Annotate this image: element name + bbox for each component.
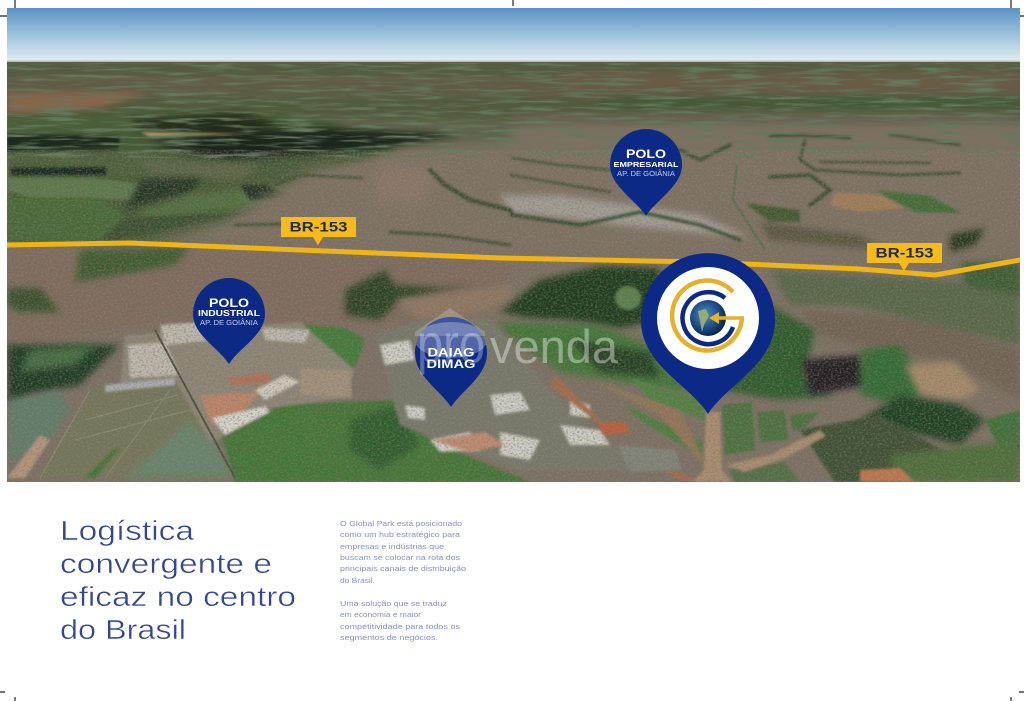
- road and fields on the right: [733, 165, 985, 252]
- road label: BR-153 left: BR-153: [290, 218, 348, 234]
- pin: Daiag Dimag: [415, 317, 487, 407]
- pin: Polo Empresarial: AP. DE GOIÂNIA: [617, 169, 675, 178]
- pin: Polo Empresarial: EMPRESARIAL: [614, 160, 679, 169]
- mid urban area: [159, 123, 1014, 244]
- road label: BR-153 left: [281, 217, 356, 245]
- body text: em economia e maior: [340, 610, 422, 619]
- pin: Daiag Dimag: DIMAG: [426, 359, 476, 371]
- heading: Logística: [60, 515, 195, 546]
- pin: Daiag Dimag: DAIAG: [428, 348, 475, 360]
- horizon bands: [0, 62, 1024, 148]
- body text: buscam se colocar na rota dos: [340, 553, 460, 562]
- access roads under main pin: [692, 412, 826, 482]
- pin: Polo Empresarial: POLO: [626, 149, 666, 161]
- body text: [340, 519, 466, 642]
- heading: convergente e: [60, 548, 272, 579]
- terrain base: [7, 62, 1020, 483]
- body text: como um hub estratégico para: [340, 530, 461, 539]
- left fields and forests: [7, 112, 460, 245]
- green creeks through the city: [235, 135, 960, 245]
- watermark: provenda: [415, 308, 619, 375]
- watermark: provenda: pro: [417, 312, 485, 375]
- pin: Polo Industrial: POLO: [209, 298, 249, 310]
- body text: O Global Park está posicionado: [340, 519, 462, 528]
- pin: Global Park main location: [641, 253, 775, 414]
- body text: principais canais de distribuição: [340, 564, 466, 573]
- pin: Polo Empresarial: [610, 129, 682, 216]
- watermark: provenda: venda: [490, 320, 619, 373]
- pin: Polo Industrial: INDUSTRIAL: [198, 309, 260, 318]
- road: BR-153: [7, 243, 1020, 275]
- road label: BR-153 right: BR-153: [876, 244, 934, 260]
- heading: [60, 515, 296, 645]
- heading: eficaz no centro: [60, 581, 296, 612]
- body text: competitividade para todos os: [340, 622, 460, 631]
- industrial district left: [105, 322, 355, 478]
- road label: BR-153 right: [867, 243, 942, 271]
- body text: empresas e indústrias que: [340, 542, 444, 551]
- lots and pasture lower left: [7, 385, 232, 478]
- photo grain: [7, 63, 1020, 482]
- industrial district centre: [375, 318, 704, 482]
- body text: segmentos de negócios.: [340, 633, 438, 642]
- heading: do Brasil: [60, 614, 186, 645]
- near-field urban areas: [7, 247, 1020, 400]
- forest and green areas: [7, 266, 1020, 482]
- pin: Polo Industrial: [193, 278, 265, 364]
- sky: [7, 8, 1020, 63]
- logo: Global Park G: [672, 281, 744, 351]
- body text: Uma solução que se traduz: [340, 599, 447, 608]
- body text: do Brasil.: [340, 576, 375, 585]
- aerial photograph: [0, 8, 1024, 483]
- pin: Polo Industrial: AP. DE GOIÂNIA: [200, 318, 258, 327]
